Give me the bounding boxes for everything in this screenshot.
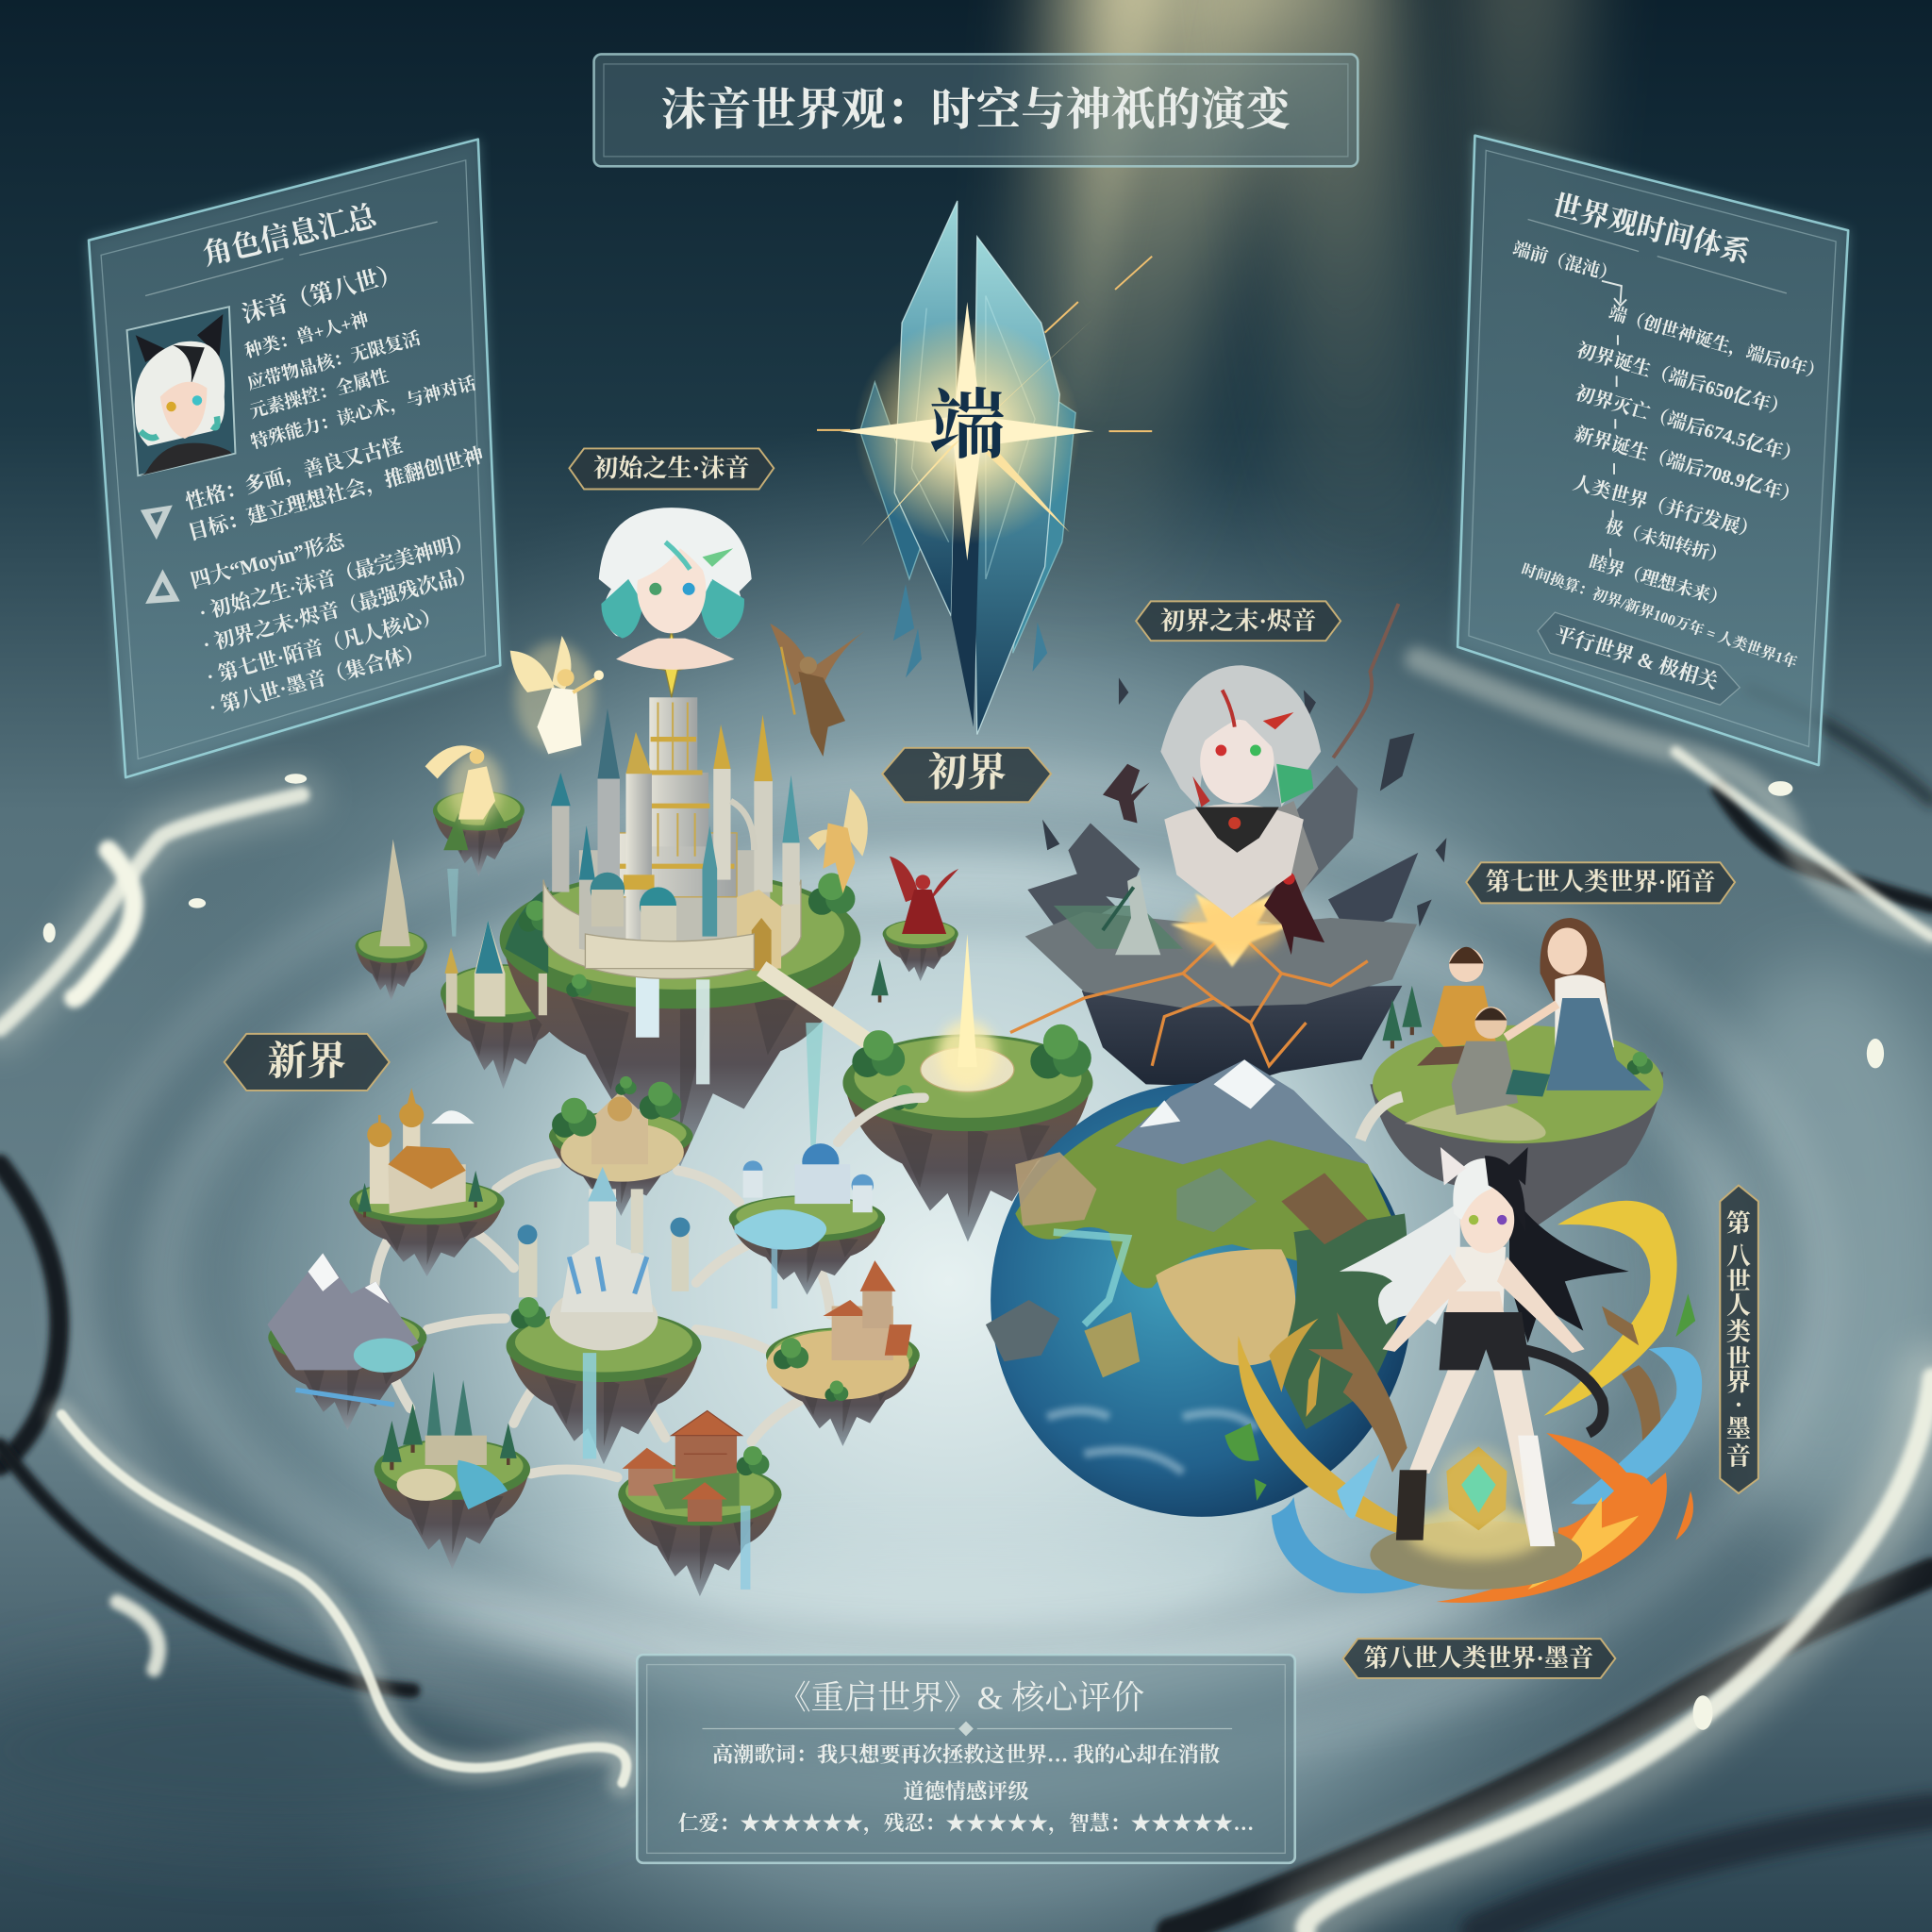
island: forest lake — [375, 1372, 530, 1570]
island: pagoda — [618, 1411, 782, 1596]
plaque: 初界: 初界 — [928, 752, 1007, 795]
effect: gold swoosh — [1238, 1201, 1677, 1547]
character stats: · 第七世·陌音（凡人核心） — [204, 604, 444, 689]
plaque: 第八世 vertical: 世 — [1726, 1268, 1751, 1295]
rating heading: 道德情感评级 — [903, 1780, 1029, 1804]
plaque: 第八世 vertical: 第 — [1726, 1209, 1751, 1237]
timeline entries — [1510, 239, 1827, 672]
character stats: · 初始之生·沫音（最完美神明） — [196, 529, 475, 625]
lyric line: 高潮歌词：我只想要再次拯救这世界… 我的心却在消散 — [712, 1742, 1220, 1766]
new world: island cluster — [267, 1076, 924, 1596]
character stats: · 第八世·墨音（集合体） — [207, 641, 426, 720]
angel: brown — [770, 624, 865, 757]
character stats: 特殊能力：读心术，与神对话 — [248, 373, 478, 453]
footer plaque — [1538, 612, 1740, 705]
plaque: 初界 — [882, 748, 1051, 802]
timeline entries: 睦界（理想未来） — [1587, 552, 1730, 610]
plaque: 新界 — [225, 1034, 390, 1091]
ink swirls — [0, 690, 1932, 1932]
plaque: 第八世 vertical: 世 — [1726, 1345, 1751, 1373]
bridge — [761, 969, 937, 1070]
crystal glyph: 端 — [929, 384, 1006, 469]
family island — [1360, 918, 1663, 1232]
rating stars: 仁爱：★★★★★★，残忍：★★★★★，智慧：★★★★★… — [678, 1812, 1254, 1836]
timeline entries: 端前（混沌） — [1510, 239, 1620, 286]
title banner: 沫音世界观：时空与神祇的演变 — [661, 86, 1291, 136]
plaque: 第八世 vertical: 类 — [1726, 1318, 1751, 1345]
island: golden palace — [349, 1088, 505, 1276]
figure: mother — [1506, 918, 1651, 1091]
effect: fire — [1437, 1433, 1667, 1603]
icon: forms emblem — [145, 569, 180, 604]
effect: wood — [1308, 1306, 1660, 1473]
island: red manor — [766, 1260, 920, 1446]
plaque: 第八世 vertical: 墨 — [1726, 1416, 1752, 1443]
rock base — [1370, 1521, 1582, 1590]
plaque: 初界之末: 初界之末·烬音 — [1160, 608, 1316, 635]
plaque: 第八世 horizontal: 第八世人类世界·墨音 — [1363, 1645, 1593, 1673]
character stats: · 初界之末·烬音（最强残次品） — [200, 561, 479, 657]
figures in battle — [1103, 764, 1324, 955]
character: end of first world — [1160, 665, 1321, 918]
plaque: 第八世 horizontal — [1343, 1639, 1615, 1678]
title banner — [594, 54, 1357, 166]
angel: gold left — [510, 636, 604, 754]
plaque: 初始之生 — [569, 448, 774, 490]
panel heading: 世界观时间体系 — [1549, 189, 1754, 269]
character stats: 应带物晶核：无限复活 — [245, 327, 423, 394]
plaque: 第八世 vertical: 界 — [1726, 1369, 1751, 1396]
angel: red — [890, 857, 958, 934]
panel: restart world evaluation — [637, 1655, 1295, 1863]
character stats: 元素操控：全属性 — [247, 365, 391, 423]
character stats: 种类：兽+人+神 — [242, 308, 371, 362]
small floating islands — [356, 791, 958, 1001]
figure: children — [1417, 947, 1550, 1115]
panel: character info — [89, 140, 500, 777]
plaque: 第八世 vertical — [1720, 1185, 1758, 1493]
shattered first world island — [1010, 604, 1446, 1087]
timeline entries: 端（创世神诞生，端后0年） — [1607, 302, 1827, 384]
panel heading: 《重启世界》& 核心评价 — [777, 1679, 1144, 1716]
plaque: 第八世 vertical: 八 — [1726, 1243, 1751, 1271]
panel: world timeline — [1457, 136, 1848, 765]
island: temple — [549, 1076, 693, 1216]
icon: leaves — [1224, 1293, 1695, 1501]
white mist swirls — [0, 659, 1932, 1932]
plaque: 新界: 新界 — [267, 1040, 346, 1084]
timeline entries: 时间换算：初界/新界100万年 = 人类世界1年 — [1519, 560, 1800, 672]
center island with light beam — [842, 934, 1092, 1241]
plaque: 初始之生: 初始之生·沫音 — [593, 455, 750, 482]
effect: water — [1272, 1497, 1491, 1593]
angels — [425, 624, 958, 934]
globe: human world — [986, 1059, 1412, 1517]
gold star — [640, 631, 705, 697]
character stats: 四大“Moyin”形态 — [188, 529, 348, 592]
character: initial Moyin — [599, 508, 752, 670]
plaque: 第七世 — [1466, 862, 1735, 903]
first world: castle islands — [356, 631, 958, 1167]
timeline entries: 初界灭亡（端后674.5亿年） — [1573, 381, 1804, 468]
angel: gold right — [808, 789, 868, 893]
crystal: 端 — [817, 201, 1152, 734]
gem — [1446, 1446, 1507, 1530]
character stats: 性格：多面，善良又古怪 — [183, 434, 406, 514]
body — [1446, 1247, 1506, 1315]
character stats — [183, 259, 486, 720]
character: eighth Moyin with elements — [1224, 1147, 1702, 1603]
bridges — [375, 1098, 924, 1477]
island: central crystal castle — [507, 1167, 701, 1464]
main island — [441, 870, 889, 1167]
timeline arrows — [1602, 281, 1626, 557]
timeline entries: 初界诞生（端后650亿年） — [1574, 338, 1791, 421]
plaque: 第八世 vertical: · — [1735, 1391, 1742, 1418]
plaque: 第七世: 第七世人类世界·陌音 — [1486, 869, 1716, 896]
portrait — [127, 307, 235, 475]
hair back — [1340, 1201, 1460, 1324]
timeline entries: 人类世界（并行发展） — [1571, 472, 1760, 542]
plaque: 第八世 vertical: 音 — [1726, 1442, 1751, 1470]
island: blue dome — [729, 1143, 885, 1308]
angel: small left — [425, 745, 503, 825]
panel heading: 角色信息汇总 — [199, 199, 381, 272]
tail — [1521, 1349, 1604, 1433]
footer plaque: 平行世界 & 极相关 — [1552, 623, 1721, 693]
castle — [445, 697, 937, 1070]
plaque: 初界之末 — [1136, 601, 1341, 641]
icon: personality emblem — [141, 506, 173, 540]
timeline entries: 极（未知转折） — [1603, 515, 1729, 568]
head — [1460, 1187, 1514, 1253]
timeline entries: 新界诞生（端后708.9亿年） — [1572, 422, 1803, 508]
character stats: 沫音（第八世） — [240, 259, 404, 327]
island: snowy mountains — [267, 1253, 426, 1430]
character stats: 目标：建立理想社会，推翻创世神 — [186, 443, 486, 545]
plaque: 第八世 vertical: 人 — [1726, 1292, 1751, 1320]
